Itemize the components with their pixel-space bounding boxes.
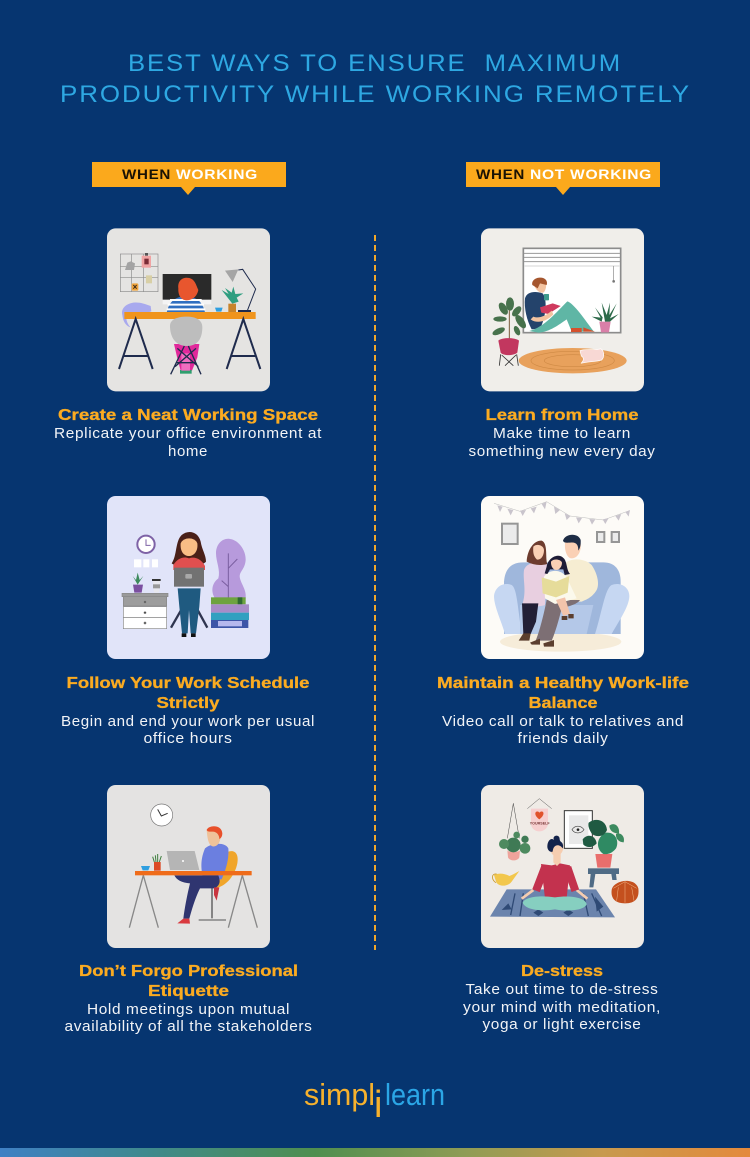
icon: coffee cup bbox=[152, 579, 161, 593]
icon: daughter with book bbox=[542, 556, 577, 620]
icon: hanging plant bbox=[499, 803, 530, 860]
icon: sticky notes bbox=[134, 559, 158, 567]
icon: hair bbox=[178, 278, 198, 300]
title: PRODUCTIVITY WHILE WORKING REMOTELY bbox=[60, 81, 691, 108]
icon: stool bbox=[171, 603, 207, 628]
text block: maintain a healthy work-life balance bbox=[437, 675, 689, 747]
banner: when not working: NOT WORKING bbox=[530, 167, 652, 182]
logo: simplilearn: learn bbox=[385, 1077, 445, 1112]
icon: framed eye print bbox=[564, 811, 592, 848]
logo: simplilearn: simpl bbox=[304, 1077, 375, 1112]
icon: patterned rug bbox=[490, 889, 615, 917]
title: BEST WAYS TO ENSURE MAXIMUM bbox=[128, 50, 622, 77]
text block: learn from home: Learn from Home bbox=[486, 407, 639, 424]
text block: follow your work schedule: Strictly bbox=[156, 695, 220, 712]
icon: sleeping cat bbox=[580, 349, 604, 363]
icon: floor plant bbox=[491, 297, 528, 340]
banner: when not working bbox=[466, 162, 660, 195]
icon: trestle legs bbox=[129, 875, 257, 928]
icon: side table bbox=[588, 868, 619, 887]
icon: monitor bbox=[163, 274, 211, 304]
icon: heart pennant: YOURSELF bbox=[530, 822, 550, 826]
text block: learn from home: something new every day bbox=[468, 443, 656, 460]
icon: striped shirt bbox=[166, 296, 206, 317]
panel: work-life balance illustration bbox=[481, 496, 644, 659]
title bbox=[60, 50, 691, 108]
icon: man with laptop bbox=[167, 826, 228, 924]
panel: professional etiquette illustration bbox=[107, 785, 270, 948]
bottom gradient bar bbox=[0, 1148, 750, 1157]
icon: meditating woman bbox=[522, 836, 587, 910]
icon: book stack bbox=[211, 597, 249, 628]
icon: father bbox=[530, 535, 598, 647]
icon: sofa bbox=[494, 562, 629, 634]
text block: professional etiquette: Etiquette bbox=[148, 983, 229, 1000]
text block: professional etiquette bbox=[64, 963, 312, 1035]
icon: pouf bbox=[612, 881, 639, 903]
center dashed divider bbox=[374, 235, 376, 950]
text block: create a neat working space: home bbox=[168, 443, 208, 460]
icon: lamp bbox=[225, 269, 256, 312]
icon: drawer cabinet bbox=[122, 593, 168, 629]
banner: when working bbox=[92, 162, 286, 195]
icon: wall grid bbox=[120, 254, 158, 292]
banner: when working: WORKING bbox=[176, 167, 258, 182]
icon: cat bbox=[122, 303, 151, 327]
icon: bunting bbox=[494, 502, 630, 525]
text block: maintain a healthy work-life balance: Video call or talk to relatives and bbox=[442, 713, 684, 730]
icon: purple tree bbox=[212, 539, 246, 598]
text block: follow your work schedule: office hours bbox=[144, 730, 232, 747]
icon: man reading bbox=[525, 278, 595, 333]
icon: heart pennant bbox=[527, 799, 552, 831]
icon: chair bbox=[199, 851, 238, 920]
icon: plant stand bbox=[498, 338, 519, 366]
text block: de-stress bbox=[463, 963, 661, 1033]
icon: cup bbox=[215, 308, 223, 312]
icon: pencil pot bbox=[153, 854, 161, 871]
icon: potted plant bbox=[222, 287, 243, 312]
text block: professional etiquette: availability of all the stakeholders bbox=[64, 1018, 312, 1035]
logo: simplilearn: i bbox=[374, 1084, 382, 1126]
text block: learn from home: Make time to learn bbox=[493, 425, 631, 442]
icon: blue cup bbox=[141, 866, 150, 870]
text block: learn from home bbox=[468, 407, 656, 460]
text block: follow your work schedule: Begin and end your work per usual bbox=[61, 713, 315, 730]
text block: create a neat working space: Replicate your office environment at bbox=[54, 425, 322, 442]
icon: pinned notes bbox=[125, 253, 152, 291]
panel: work schedule illustration bbox=[107, 496, 270, 659]
icon: picture frames bbox=[502, 524, 619, 544]
panel: learn from home illustration bbox=[481, 228, 644, 391]
banner: when not working: WHEN bbox=[476, 167, 525, 182]
text block: create a neat working space bbox=[54, 407, 322, 460]
text block: de-stress: Take out time to de-stress bbox=[466, 981, 658, 998]
banner: when working: WHEN bbox=[122, 167, 171, 182]
text block: maintain a healthy work-life balance: Balance bbox=[528, 695, 598, 712]
icon: purple plant pot bbox=[133, 573, 143, 593]
text block: de-stress: your mind with meditation, bbox=[463, 999, 661, 1016]
icon: aloe plant bbox=[592, 303, 619, 332]
text block: professional etiquette: Hold meetings upon mutual bbox=[87, 1001, 290, 1018]
icon: pink trousers bbox=[174, 344, 199, 371]
text block: professional etiquette: Don’t Forgo Professional bbox=[79, 963, 298, 980]
panel: neat working space illustration bbox=[107, 228, 270, 391]
icon: desk bbox=[135, 871, 252, 875]
icon: rug shadow bbox=[500, 632, 621, 652]
icon: mother bbox=[519, 541, 547, 641]
text block: maintain a healthy work-life balance: Maintain a Healthy Work-life bbox=[437, 675, 689, 692]
logo: simplilearn bbox=[304, 1077, 445, 1126]
icon: woman with laptop bbox=[172, 532, 206, 637]
icon: wall clock bbox=[151, 804, 173, 826]
icon: chair bbox=[170, 317, 202, 374]
icon: monstera plant bbox=[583, 820, 624, 868]
text block: follow your work schedule: Follow Your Work Schedule bbox=[66, 675, 310, 692]
panel: de-stress illustration bbox=[481, 785, 644, 948]
text block: follow your work schedule bbox=[61, 675, 315, 747]
icon: wall clock bbox=[137, 536, 155, 553]
icon: round rug bbox=[519, 348, 627, 373]
icon: window bbox=[523, 248, 621, 333]
text block: de-stress: yoga or light exercise bbox=[482, 1016, 642, 1033]
text block: maintain a healthy work-life balance: friends daily bbox=[518, 730, 608, 747]
icon: trestle legs bbox=[119, 319, 260, 369]
icon: watering can bbox=[492, 871, 519, 886]
icon: desk bbox=[124, 312, 256, 319]
text block: create a neat working space: Create a Neat Working Space bbox=[58, 407, 318, 424]
text block: de-stress: De-stress bbox=[521, 963, 603, 980]
